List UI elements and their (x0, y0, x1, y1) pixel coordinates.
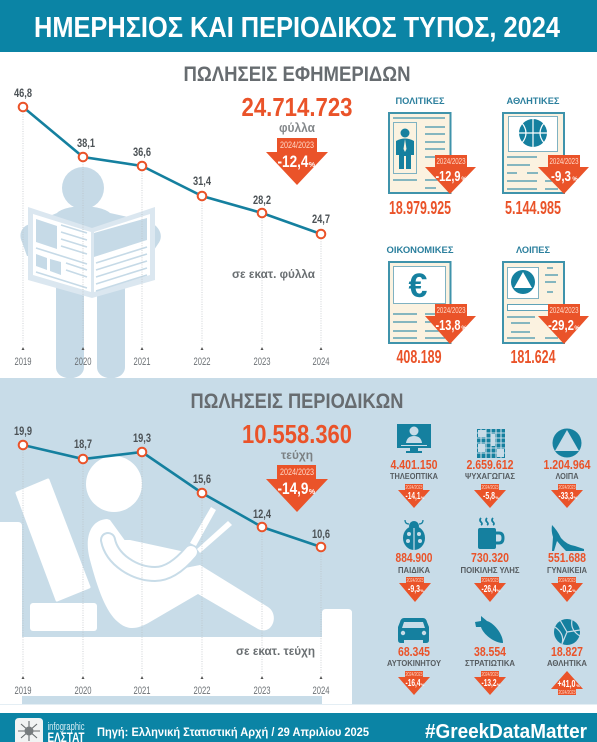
icon: volleyball (554, 619, 580, 645)
arrow: -9,3%: 2024/2023 (406, 578, 424, 584)
arrow: -9,3% (399, 577, 431, 602)
magazine: other (544, 428, 591, 508)
arrow: -9,3% (538, 155, 589, 194)
magazine: women: ΓΥΝΑΙΚΕΙΑ (547, 565, 587, 575)
magazine: sports (547, 619, 587, 696)
icon: steaming mug (478, 518, 503, 549)
category: sports: 5.144.985 (505, 198, 561, 218)
arrow: -29,2% (538, 304, 589, 344)
header banner (0, 0, 597, 52)
line chart: magazine sales: 12,4 (253, 507, 271, 521)
arrow: +41,0%: +41,0 (558, 679, 576, 690)
line chart: magazine sales: 2022 (194, 685, 210, 697)
arrow: -14,1%: -14,1 (406, 491, 421, 502)
category: other: 181.624 (510, 347, 556, 367)
arrow: newspapers -12,4%: % (309, 162, 316, 169)
arrow: -12,9%: % (461, 177, 467, 183)
arrow: -9,3%: -9,3 (408, 584, 420, 595)
category: political: ΠΟΛΙΤΙΚΕΣ (396, 96, 445, 106)
arrow: -33,3%: -33,3 (558, 491, 574, 502)
arrow: -13,8%: % (461, 326, 467, 332)
category: sports (503, 96, 589, 218)
magazine: entertainment (465, 429, 515, 508)
magazine: children: 884.900 (396, 550, 432, 565)
line chart: magazine sales: 19,9 (14, 424, 32, 438)
line chart: newspaper sales: 2023 (254, 356, 270, 368)
arrow: -0,2% (551, 577, 583, 602)
illustration: person reading on couch (0, 456, 352, 704)
heading: magazine sales: ΠΩΛΗΣΕΙΣ ΠΕΡΙΟΔΙΚΩΝ (190, 390, 404, 413)
logo: ELSTAT: infographic (48, 721, 85, 733)
line chart: newspaper sales: 24,7 (312, 212, 330, 226)
arrow: -26,4% (474, 577, 506, 602)
arrow: magazines -14,9% (266, 465, 328, 512)
line chart: newspaper sales: 31,4 (193, 174, 211, 188)
magazine: general interest: ΠΟΙΚΙΛΗΣ ΥΛΗΣ (460, 565, 520, 575)
icon: ladybug (403, 520, 425, 550)
arrow: -29,2%: 2024/2023 (550, 306, 579, 315)
total: magazine issues: τεύχη (281, 448, 313, 462)
arrow: -12,9%: 2024/2023 (436, 157, 466, 166)
arrow: -13,8%: -13,8 (436, 317, 460, 334)
magazine: television: ΤΗΛΕΟΠΤΙΚΑ (390, 471, 438, 481)
icon: high heel (552, 525, 584, 551)
total: magazine issues (242, 419, 352, 462)
arrow: -12,9% (425, 155, 476, 194)
magazine: entertainment: ΨΥΧΑΓΩΓΙΑΣ (465, 471, 515, 481)
magazine: entertainment: 2.659.612 (466, 457, 514, 472)
arrow: -29,2%: % (574, 326, 580, 332)
arrow: -13,2%: % (497, 682, 501, 687)
arrow: -14,1%: % (421, 495, 425, 500)
arrow: -13,2% (474, 671, 506, 695)
category: political (389, 96, 476, 218)
category: financial: ΟΙΚΟΝΟΜΙΚΕΣ (386, 245, 454, 255)
category: other (503, 245, 589, 367)
magazine: general interest (460, 518, 520, 602)
panel: newspaper sales (14, 63, 589, 378)
arrow: +41,0% (551, 671, 583, 696)
icon: monitor (397, 424, 431, 453)
icon: triangle in circle (552, 428, 582, 458)
magazine: general interest: 730.320 (471, 550, 509, 565)
magazine: sports: ΑΘΛΗΤΙΚΑ (547, 658, 587, 668)
category: financial (386, 245, 476, 367)
category: political: 18.979.925 (389, 198, 451, 218)
magazine: women (547, 525, 587, 602)
arrow: -0,2%: 2024/2023 (558, 578, 576, 584)
line chart: magazine sales: 19,3 (133, 431, 151, 445)
magazine: military: 38.554 (474, 644, 507, 659)
line chart: newspaper sales: 46,8 (14, 86, 32, 100)
magazine: military: ΣΤΡΑΤΙΩΤΙΚΑ (465, 658, 515, 668)
line chart: magazine sales: 18,7 (74, 437, 92, 451)
line chart: newspaper sales: 2022 (194, 356, 210, 368)
magazine: automotive: 68.345 (398, 644, 430, 659)
arrow: -9,3%: 2024/2023 (550, 157, 579, 166)
arrow: -5,8%: 2024/2023 (482, 485, 499, 491)
arrow: -26,4%: % (497, 588, 501, 593)
arrow: newspapers -12,4% (266, 138, 328, 185)
arrow: -33,3%: % (574, 495, 578, 500)
magazine: automotive: ΑΥΤΟΚΙΝΗΤΟΥ (387, 658, 441, 668)
arrow: -33,3%: 2024/2023 (558, 485, 576, 491)
arrow: magazines -14,9%: -14,9 (278, 479, 308, 498)
arrow: -5,8%: % (495, 495, 499, 500)
arrow: -16,4%: % (421, 682, 425, 687)
arrow: +41,0%: 2024/2023 (558, 690, 576, 696)
arrow: newspapers -12,4%: -12,4 (278, 152, 309, 171)
line chart: newspaper sales: 2020 (74, 356, 92, 368)
category: financial: 408.189 (396, 347, 442, 367)
magazine: children: ΠΑΙΔΙΚΑ (398, 565, 430, 575)
line chart: newspaper sales: 2019 (14, 356, 32, 368)
icon: crossword (477, 429, 505, 458)
magazine: television: 4.401.150 (390, 457, 438, 472)
panel: magazine sales background (0, 378, 597, 704)
arrow: newspapers -12,4%: 2024/2023 (280, 140, 314, 150)
arrow: -13,8%: 2024/2023 (436, 306, 466, 315)
arrow: -26,4%: 2024/2023 (482, 578, 499, 584)
arrow: -5,8%: -5,8 (483, 491, 495, 502)
icon: euro: € (409, 267, 428, 305)
unit label: magazines: σε εκατ. τεύχη (236, 644, 315, 658)
line chart: magazine sales: 10,6 (312, 527, 330, 541)
arrow: -9,3%: % (572, 177, 578, 183)
arrow: -13,2%: -13,2 (482, 678, 497, 689)
arrow: -26,4%: -26,4 (482, 584, 497, 595)
arrow: -16,4% (398, 671, 430, 695)
line chart: newspaper sales: 2024 (312, 356, 330, 368)
arrow: -16,4%: -16,4 (406, 678, 421, 689)
category: other: ΛΟΙΠΕΣ (516, 245, 551, 255)
arrow: -13,8% (425, 304, 476, 344)
total: newspaper sheets: 24.714.723 (242, 92, 352, 122)
line chart: magazine sales (14, 424, 330, 697)
arrow: -16,4%: 2024/2023 (406, 672, 423, 678)
heading: newspaper sales: ΠΩΛΗΣΕΙΣ ΕΦΗΜΕΡΙΔΩΝ (184, 63, 410, 86)
arrow: -5,8% (474, 484, 506, 508)
icon: bomb (475, 616, 503, 643)
arrow: -14,1% (398, 484, 430, 508)
line chart: newspaper sales: 36,6 (133, 145, 151, 159)
category: sports: ΑΘΛΗΤΙΚΕΣ (506, 96, 560, 106)
magazine: military (465, 616, 515, 695)
arrow: -13,2%: 2024/2023 (482, 672, 499, 678)
total: newspaper sheets: φύλλα (279, 120, 315, 135)
line chart: newspaper sales: 38,1 (77, 136, 95, 150)
line chart: newspaper sales (14, 86, 330, 368)
arrow: -33,3% (551, 484, 583, 508)
line chart: magazine sales: 2023 (254, 685, 270, 697)
arrow: -12,9%: -12,9 (436, 168, 460, 185)
arrow: magazines -14,9%: 2024/2023 (280, 467, 314, 477)
icon: basketball (519, 119, 547, 147)
total: newspaper sheets (242, 92, 352, 135)
arrow: -0,2%: % (572, 588, 576, 593)
arrow: -14,1%: 2024/2023 (406, 485, 423, 491)
magazine: sports: 18.827 (551, 644, 583, 659)
line chart: magazine sales: 15,6 (193, 472, 211, 486)
arrow: +41,0%: % (576, 683, 580, 688)
unit label: newspapers: σε εκατ. φύλλα (232, 267, 316, 281)
arrow: -9,3%: -9,3 (551, 168, 571, 185)
icon: triangle in circle (511, 270, 535, 294)
magazine: women: 551.688 (548, 550, 586, 565)
icon: person reading newspaper (20, 167, 161, 378)
magazine: children (396, 520, 432, 602)
source: Πηγή: Ελληνική Στατιστική Αρχή / 29 Απριλίου 2025 (97, 725, 369, 739)
line chart: magazine sales: 2024 (312, 685, 330, 697)
line chart: magazine sales: 2021 (134, 685, 150, 697)
total: magazine issues: 10.558.360 (242, 419, 352, 449)
line chart: magazine sales: 2019 (14, 685, 32, 697)
footer (0, 713, 597, 742)
magazine: automotive (387, 618, 441, 695)
magazine: other: ΛΟΙΠΑ (556, 471, 578, 481)
logo: ELSTAT (15, 718, 85, 742)
arrow: -0,2%: -0,2 (560, 584, 572, 595)
line chart: newspaper sales: 2021 (134, 356, 150, 368)
arrow: -9,3%: % (420, 588, 424, 593)
line chart: magazine sales: 2020 (74, 685, 92, 697)
line chart: newspaper sales: 28,2 (253, 193, 271, 207)
arrow: -29,2%: -29,2 (548, 317, 574, 334)
magazine: television (390, 424, 438, 508)
arrow: magazines -14,9%: % (309, 489, 316, 496)
icon: car (398, 618, 429, 643)
icon: man in suit (396, 128, 414, 169)
